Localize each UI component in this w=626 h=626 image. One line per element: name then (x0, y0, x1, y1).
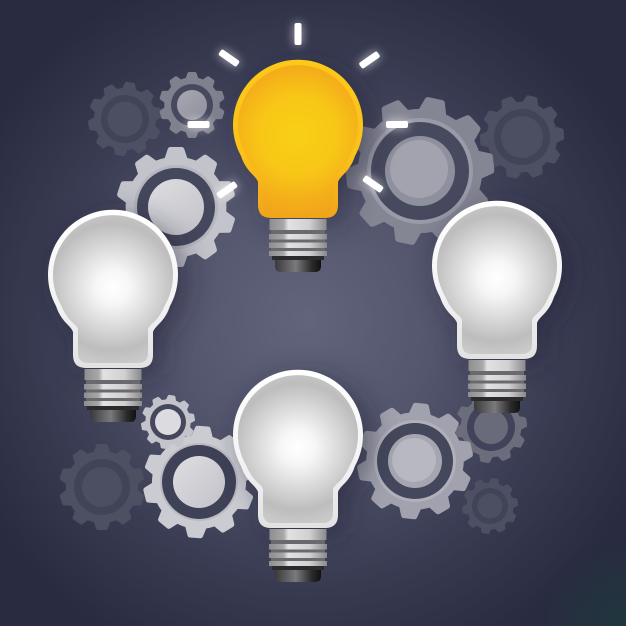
ray: lower right (362, 175, 384, 193)
gear: small bottom left (137, 391, 199, 453)
bulb shadows (56, 66, 570, 534)
gear: medium bottom left (139, 422, 259, 542)
bulb: white left (48, 210, 178, 422)
bulb: white bottom (233, 370, 363, 582)
gear: faint top left (83, 77, 167, 161)
gear: faint bottom left (58, 444, 146, 530)
ray: left (188, 121, 210, 128)
ray: right (386, 121, 408, 128)
gear: large top right (331, 83, 509, 259)
bulb: white right (432, 201, 562, 413)
gear: faint bottom right (457, 474, 523, 538)
gear: medium bottom right (351, 397, 479, 525)
ray: upper right (358, 51, 381, 69)
gear: faint top right (471, 86, 573, 188)
gear: medium right bottom, dark (449, 385, 533, 469)
ray: lower left (216, 181, 238, 199)
gear: small top (159, 72, 225, 138)
rays around the lit bulb (188, 23, 408, 199)
bulb: lit yellow top (233, 60, 363, 272)
gear: medium left (115, 147, 237, 267)
ray: upper left (218, 49, 240, 67)
ray: top (294, 23, 302, 45)
